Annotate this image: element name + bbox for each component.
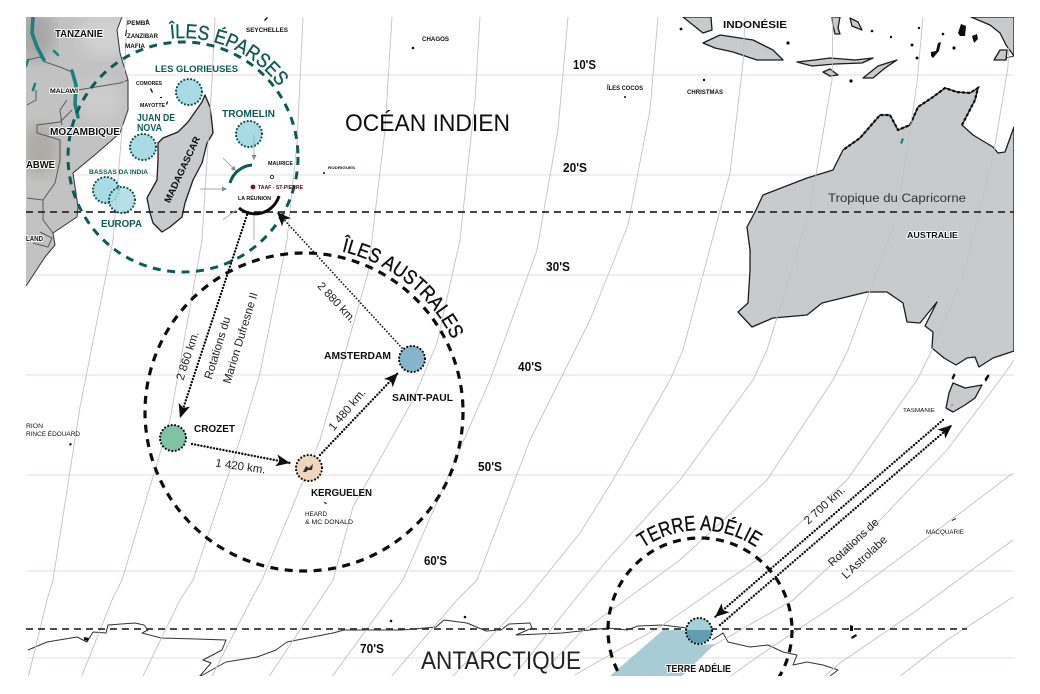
labels: Îles Éparses islands: LES GLORIEUSES xyxy=(155,64,238,74)
labels: small islands north: CHRISTMAS xyxy=(687,90,723,96)
heading: Terre Adélie: TERRE ADÉLIE xyxy=(635,516,763,548)
labels: latitudes: 60'S xyxy=(424,554,447,568)
labels: latitudes: 70'S xyxy=(360,642,384,656)
marker: Europa xyxy=(109,187,135,213)
land: Antarctica coastline xyxy=(28,616,857,677)
labels: Îles Éparses islands: BASSAS DA INDIA xyxy=(89,169,148,176)
labels: Îles Australes islands: CROZET xyxy=(194,424,235,435)
labels: latitudes: 10'S xyxy=(573,58,596,72)
marker: Bassas da India xyxy=(93,177,119,203)
labels: small islands north: LA RÉUNION xyxy=(238,194,271,202)
labels: Africa: MALAWI xyxy=(50,88,78,95)
route: La Réunion to Crozet xyxy=(180,215,247,418)
labels: Îles Australes islands: AMSTERDAM xyxy=(324,351,391,362)
marker: Juan de Nova xyxy=(130,134,156,160)
circle: Terre Adélie region xyxy=(608,538,792,694)
route: Terre Adélie to Tasmania xyxy=(720,425,952,625)
route: Tasmania to Terre Adélie xyxy=(715,420,943,617)
country borders xyxy=(27,57,128,247)
route: Crozet to Kerguelen xyxy=(192,444,290,463)
labels: route distances: 1 420 km. xyxy=(215,458,266,476)
labels: minor southern islands: TASMANIE xyxy=(903,408,935,414)
small island dots xyxy=(69,17,956,521)
labels: latitudes: 20'S xyxy=(563,161,587,175)
labels: small islands north: PEMBA xyxy=(127,21,151,27)
labels: route distances xyxy=(175,280,848,527)
labels: Indonesia and Australia: Tropique du Capricorne xyxy=(828,193,966,205)
route: Amsterdam to La Réunion xyxy=(277,212,402,348)
labels: route distances: 1 480 km. xyxy=(327,387,369,433)
labels: route distances: 2 860 km. xyxy=(175,330,202,382)
labels: small islands north: MAFIA xyxy=(125,44,146,50)
labels: Îles Éparses islands: NOVA xyxy=(137,123,162,134)
line: Antarctic circle xyxy=(26,628,967,630)
labels: Îles Australes islands xyxy=(194,351,453,499)
labels: small islands north: SEYCHELLES xyxy=(246,27,289,34)
circle: Îles Éparses region xyxy=(68,42,298,272)
labels: minor southern islands: MACQUARIE xyxy=(926,530,964,536)
labels: route distances: 2 880 km. xyxy=(315,280,358,326)
labels: small islands north: MAYOTTE xyxy=(140,103,166,109)
labels: Africa: ABWE xyxy=(26,160,55,171)
labels: latitudes xyxy=(360,58,596,656)
label: Rotations de L'Astrolabe: L'Astrolabe xyxy=(840,534,890,582)
line: Tropic of Capricorn xyxy=(26,211,1014,213)
heading: Îles Éparses: ÎLES ÉPARSES xyxy=(168,20,288,85)
labels: minor southern islands xyxy=(26,408,964,536)
labels: Indonesia and Australia xyxy=(723,18,966,240)
labels: minor southern islands: & MC DONALD xyxy=(305,520,354,526)
labels: Africa: TANZANIE xyxy=(55,28,103,40)
label: Rotations du Marion Dufresne II: Rotations du xyxy=(203,315,233,381)
labels: small islands north: ZANZIBAR xyxy=(127,34,159,40)
labels: minor southern islands: RION xyxy=(26,424,43,430)
labels: Îles Éparses islands: TROMELIN xyxy=(222,109,275,120)
marker: Tromelin xyxy=(236,121,262,147)
graticule parallels xyxy=(26,75,1014,658)
labels: Îles Éparses islands: JUAN DE xyxy=(137,113,175,124)
labels: minor southern islands: HEARD xyxy=(305,512,328,518)
heading: Océan Indien: OCÉAN INDIEN xyxy=(345,110,510,137)
heading: Îles Australes: ÎLES AUSTRALES xyxy=(343,234,463,338)
labels: latitudes: 40'S xyxy=(518,360,542,374)
land: Indonesia xyxy=(680,17,978,83)
label: Terre Adélie sector: TERRE ADÉLIE xyxy=(666,662,731,675)
heading: Antarctique: ANTARCTIQUE xyxy=(421,647,581,675)
land: Tasmania xyxy=(946,374,989,412)
labels: small islands north xyxy=(125,21,723,202)
labels: route distances: 2 700 km. xyxy=(802,484,848,527)
land: Africa xyxy=(26,17,128,286)
labels: small islands north: MAURICE xyxy=(268,161,294,167)
Terre Adélie sector xyxy=(610,630,715,676)
label: Rotations de L'Astrolabe: Rotations de xyxy=(826,516,882,569)
labels: Indonesia and Australia: INDONÉSIE xyxy=(723,18,787,31)
labels: latitudes: 50'S xyxy=(478,460,502,474)
labels: latitudes: 30'S xyxy=(546,260,570,274)
labels: Îles Australes islands: KERGUELEN xyxy=(311,488,372,499)
label: Rotations du Marion Dufresne II xyxy=(203,291,261,385)
labels: Indonesia and Australia: AUSTRALIE xyxy=(907,230,958,240)
labels: small islands north: ÎLES COCOS xyxy=(606,84,643,92)
marker: Terre Adélie base xyxy=(686,618,712,644)
labels: Africa: LAND xyxy=(26,236,43,243)
labels: Africa xyxy=(26,28,120,243)
land: Australia xyxy=(738,88,1014,367)
labels: Îles Australes islands: SAINT-PAUL xyxy=(392,393,453,404)
icon: La Réunion hub xyxy=(200,135,325,240)
land: Madagascar xyxy=(147,95,213,232)
circle: Îles Australes region xyxy=(145,253,463,571)
marker: Crozet xyxy=(160,425,186,451)
labels: small islands north: TAAF - ST-PIERRE xyxy=(258,185,304,191)
labels: Îles Éparses islands xyxy=(89,64,275,230)
label: Madagascar: MADAGASCAR xyxy=(163,135,203,205)
labels: Africa: MOZAMBIQUE xyxy=(50,126,120,138)
lakes xyxy=(26,18,78,117)
marker: Les Glorieuses xyxy=(176,79,202,105)
route: Kerguelen to Amsterdam xyxy=(320,373,398,455)
land: Papua New Guinea xyxy=(971,17,1014,60)
marker: Kerguelen xyxy=(296,455,322,481)
labels: minor southern islands: RINCE ÉDOUARD xyxy=(26,431,81,438)
labels: small islands north: RODRIGUES xyxy=(328,165,355,170)
label: Rotations du Marion Dufresne II: Marion Dufresne II xyxy=(222,291,261,385)
labels: small islands north: CHAGOS xyxy=(422,36,450,43)
labels: Îles Éparses islands: EUROPA xyxy=(101,219,142,230)
marker: Amsterdam and Saint-Paul xyxy=(399,346,425,372)
labels: small islands north: COMORES xyxy=(136,81,163,87)
